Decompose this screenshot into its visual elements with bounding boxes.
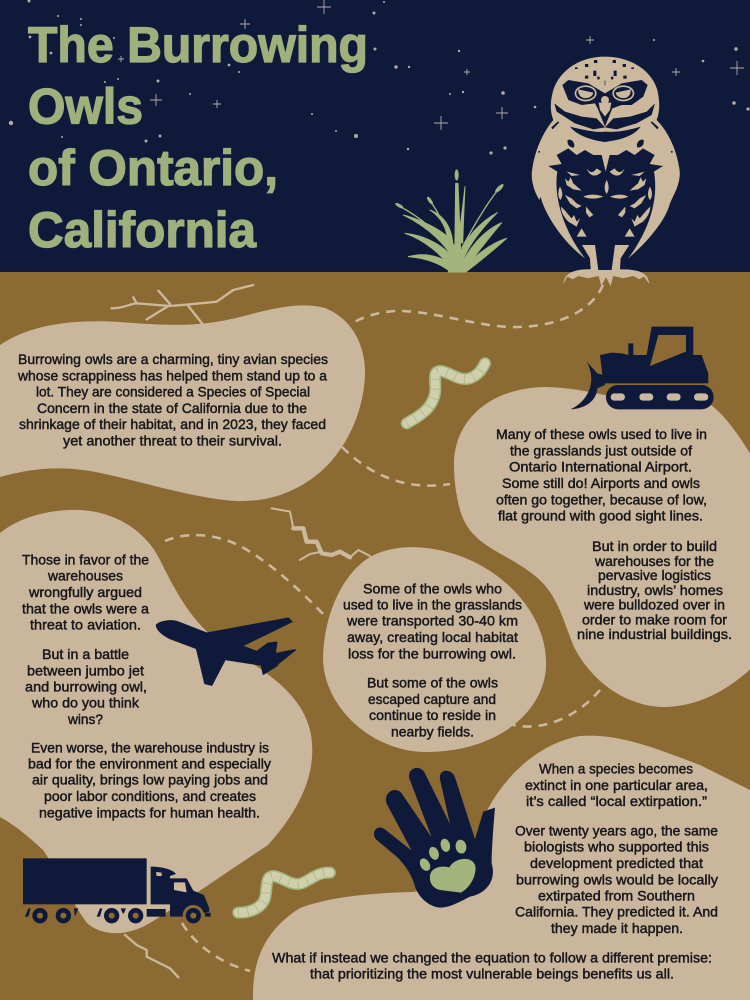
warehouse harms text: Even worse, the warehouse industry is: [31, 739, 269, 755]
conclusion text: [272, 949, 712, 982]
extirpation text: California. They predicted it. And: [515, 904, 718, 920]
title: of Ontario,: [28, 140, 278, 196]
panel: introduction: [0, 305, 365, 501]
icon: airplane: [157, 618, 295, 685]
owl body silhouette: [532, 57, 680, 258]
relocated owls text: loss for the burrowing owl.: [348, 645, 516, 661]
grasslands text: Many of these owls used to live in: [496, 426, 707, 442]
grasslands text: flat ground with good sight lines.: [498, 508, 703, 524]
warehouse harms text: bad for the environment and especially: [28, 756, 271, 772]
owl eyes: [575, 85, 634, 101]
title: [28, 17, 368, 258]
aviation text: and burrowing owl,: [25, 679, 147, 695]
relocated owls text: continue to reside in: [369, 707, 496, 723]
intro text: whose scrappiness has helped them stand up to a: [17, 367, 327, 383]
warehouse text: were bulldozed over in: [583, 597, 725, 613]
panel: relocated owls: [323, 547, 546, 752]
icon: grass tuft: [394, 169, 507, 272]
intro text: Concern in the state of California due to the: [37, 400, 307, 416]
extirpation text: it’s called “local extirpation.”: [526, 793, 707, 809]
paw print: [418, 838, 476, 893]
relocated owls text: away, creating local habitat: [347, 629, 518, 645]
conclusion text: What if instead we changed the equation to follow a different premise:: [272, 949, 712, 965]
owl beak: [599, 96, 611, 117]
extirpation text: extirpated from Southern: [538, 888, 695, 904]
aviation text: warehouses: [47, 568, 123, 584]
warehouse text: pervasive logistics: [598, 567, 711, 583]
panel: local extirpation and conclusion: [253, 736, 750, 1000]
grasslands text: the grasslands just outside of: [510, 442, 692, 458]
dashed trail connecting panels: [165, 285, 603, 971]
extirpation text: Over twenty years ago, the same: [515, 822, 718, 838]
extirpation text: development predicted that: [530, 855, 703, 871]
intro text: [17, 351, 328, 448]
owl chest band: [570, 127, 641, 142]
grasslands text: [496, 426, 707, 524]
grasslands text: Some still do! Airports and owls: [502, 475, 700, 491]
intro text: Burrowing owls are a charming, tiny avian species: [18, 351, 328, 367]
aviation text: wins?: [67, 711, 103, 727]
relocated owls text: nearby fields.: [391, 723, 474, 739]
aviation text: that the owls were a: [22, 600, 149, 616]
owl belly markings: [548, 148, 663, 272]
relocated owls text: [343, 580, 522, 739]
relocated owls text: were transported 30-40 km: [346, 613, 518, 629]
blob: [0, 305, 365, 501]
night sky background: [0, 0, 750, 272]
blob: [253, 736, 750, 1000]
icon: worm upper: [407, 363, 485, 423]
aviation text: wrongfully argued: [28, 584, 142, 600]
extirpation text: [515, 761, 718, 936]
warehouse text: But in order to build: [592, 538, 717, 554]
cracks in the ground: [112, 285, 370, 977]
warehouse text: nine industrial buildings.: [577, 626, 732, 642]
extirpation text: When a species becomes: [539, 761, 693, 777]
warehouse harms text: poor labor conditions, and creates: [44, 788, 256, 804]
icon: worm lower: [238, 873, 330, 913]
relocated owls text: used to live in the grasslands: [343, 597, 522, 613]
title: The Burrowing: [28, 17, 368, 73]
extirpation text: biologists who supported this: [524, 839, 709, 855]
warehouse harms text: air quality, brings low paying jobs and: [32, 772, 268, 788]
title: Owls: [28, 78, 143, 134]
warehouse text: warehouses for the: [594, 553, 714, 569]
owl legs and feet: [563, 245, 649, 286]
intro text: yet another threat to their survival.: [63, 432, 282, 448]
relocated owls text: But some of the owls: [367, 675, 498, 691]
aviation text: But in a battle: [42, 646, 129, 662]
icon: hand with paw print: [374, 768, 495, 908]
aviation text: between jumbo jet: [27, 662, 144, 678]
extirpation text: burrowing owls would be locally: [516, 871, 718, 887]
aviation text: Those in favor of the: [22, 552, 149, 568]
owl head and shoulder flecks: [538, 60, 673, 153]
ground: [0, 272, 750, 1000]
owl belly flecks: [558, 168, 652, 237]
blob: [323, 547, 546, 752]
owl face mask: [562, 80, 648, 127]
extirpation text: extinct in one particular area,: [525, 777, 708, 793]
aviation text: [22, 552, 149, 727]
relocated owls text: Some of the owls who: [363, 580, 502, 596]
intro text: shrinkage of their habitat, and in 2023, they faced: [19, 416, 326, 432]
warehouse harms text: negative impacts for human health.: [39, 804, 260, 820]
warehouse harms text: [28, 739, 271, 820]
stars: [9, 0, 750, 155]
icon: burrowing owl: [532, 57, 680, 286]
grasslands text: Ontario International Airport.: [509, 459, 692, 475]
blob: [0, 510, 312, 933]
grasslands text: often go together, because of low,: [496, 491, 707, 507]
title: California: [28, 202, 257, 258]
relocated owls text: escaped capture and: [368, 691, 496, 707]
intro text: lot. They are considered a Species of Special: [36, 384, 310, 400]
aviation text: threat to aviation.: [30, 617, 141, 633]
blob: [454, 387, 750, 707]
owl collar: [554, 103, 655, 129]
panel: aviation argument and warehouse harms: [0, 510, 312, 933]
extirpation text: they made it happen.: [551, 920, 683, 936]
icon: bulldozer: [571, 327, 714, 409]
warehouse text: industry, owls’ homes: [587, 582, 723, 598]
icon: semi truck: [23, 858, 211, 926]
panel: grasslands and warehouses: [454, 387, 750, 707]
warehouse text: order to make room for: [582, 611, 727, 627]
conclusion text: that prioritizing the most vulnerable beings benefits us all.: [310, 966, 674, 982]
warehouse text: [577, 538, 732, 642]
hand: [374, 768, 495, 908]
aviation text: who do you think: [31, 695, 140, 711]
